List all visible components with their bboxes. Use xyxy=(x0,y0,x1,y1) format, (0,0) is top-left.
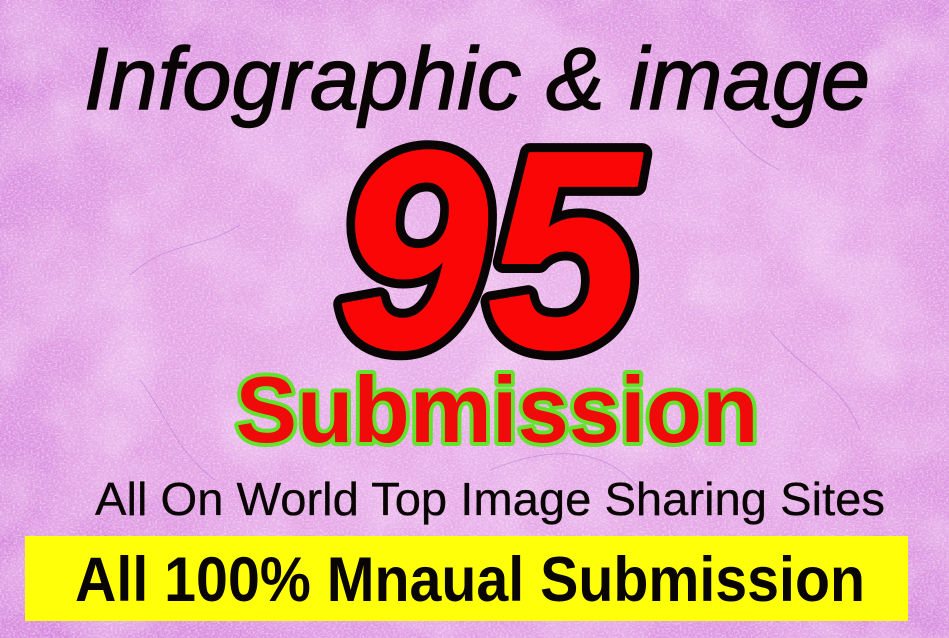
banner: manual submission: All 100% Mnaual Submission xyxy=(75,545,865,615)
heading: Submission: Submission xyxy=(236,357,758,462)
big number 95: 95 xyxy=(337,93,645,407)
subtitle: All On World Top Image Sharing Sites xyxy=(95,473,885,525)
title: Infographic & image xyxy=(84,29,870,128)
big number 95: 95 xyxy=(337,93,645,407)
